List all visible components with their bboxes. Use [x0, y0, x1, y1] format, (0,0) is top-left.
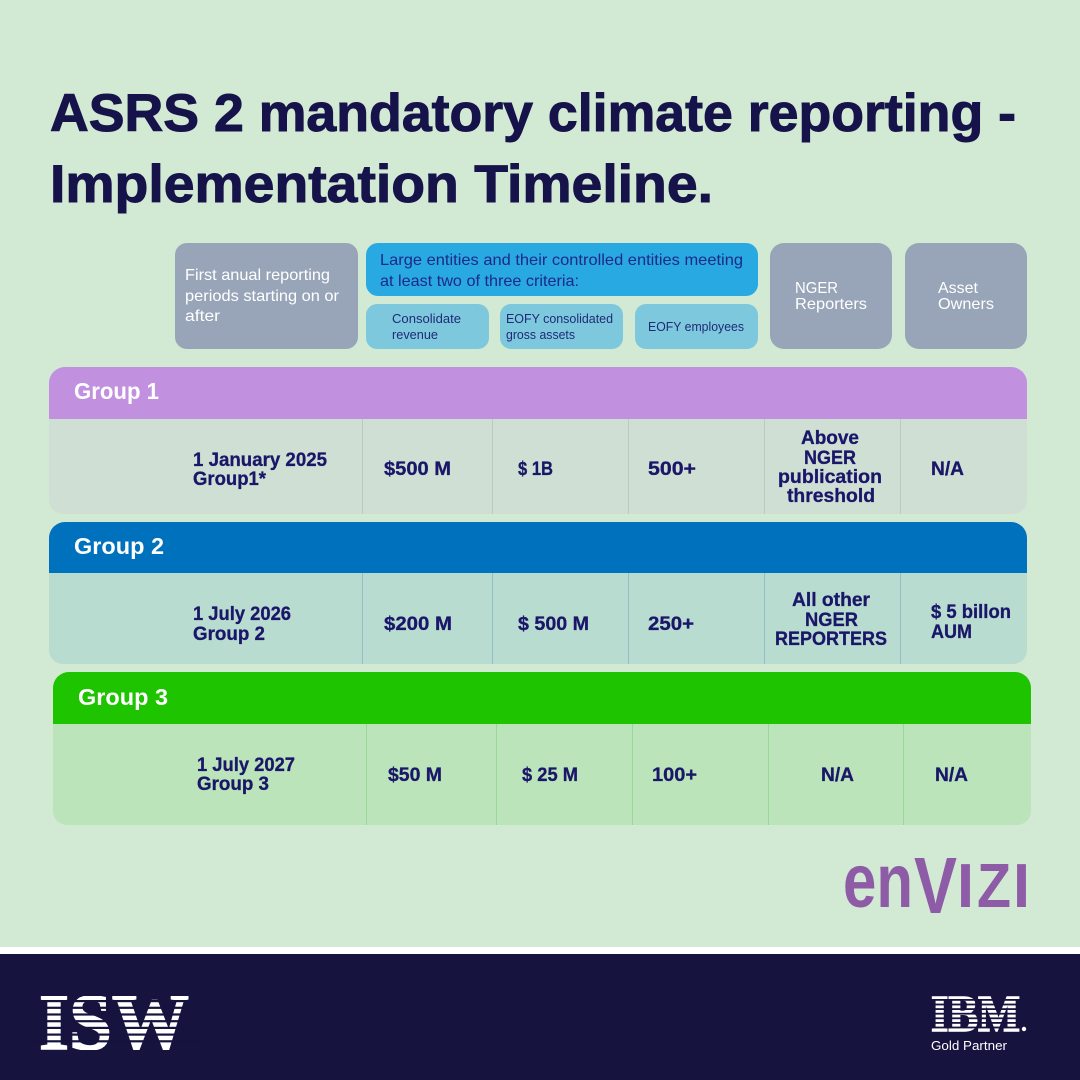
title: Implementation Timeline. [50, 155, 713, 214]
group 1 employees: 500+ [648, 459, 696, 480]
group 1 date: 1 January 2025 [193, 450, 327, 471]
header: NGER reporters: Reporters [795, 296, 867, 313]
group 1 heading: Group 1 [74, 378, 159, 404]
group 1 asset owners: N/A [931, 459, 964, 480]
group 1 NGER: Above [801, 428, 859, 449]
group 3 date: Group 3 [197, 774, 269, 795]
group 2 date: 1 July 2026 [193, 604, 291, 625]
header: NGER reporters [770, 243, 892, 349]
header: large entities criteria: at least two of three criteria: [380, 273, 579, 290]
title [50, 84, 1016, 214]
title: ASRS 2 mandatory climate reporting - [50, 84, 1016, 143]
group 2 heading: Group 2 [74, 533, 164, 559]
group 2 date [193, 604, 291, 645]
header: large entities criteria [366, 243, 758, 296]
header: asset owners: Asset [938, 280, 979, 297]
panel: group 3 [53, 672, 1031, 825]
group 2 assets: $ 500 M [518, 614, 589, 635]
group 3 date [197, 755, 295, 795]
header: first annual reporting periods: after [185, 308, 221, 325]
group 2 asset owners: AUM [931, 622, 972, 643]
header: NGER reporters: NGER [795, 280, 838, 297]
header: asset owners: Owners [938, 296, 994, 313]
panel: group 1 [49, 367, 1027, 514]
group 1 NGER: threshold [787, 486, 875, 507]
group 3 NGER: N/A [821, 765, 854, 786]
IBM Gold Partner logo: IBM [931, 986, 1020, 1043]
group 1 revenue: $500 M [384, 459, 451, 480]
group 3 employees: 100+ [652, 765, 697, 786]
header: large entities criteria: Large entities and their controlled entities meeting [380, 252, 743, 269]
group 3 date: 1 July 2027 [197, 755, 295, 776]
group 2 NGER: NGER [805, 610, 858, 631]
sub-header: gross assets [500, 304, 623, 349]
sub-header: employees [635, 304, 758, 349]
gold partner label: Gold Partner [931, 1038, 1008, 1053]
group 3 heading: Group 3 [78, 684, 168, 710]
envizi logo: I [1013, 852, 1030, 921]
group 1 NGER: NGER [804, 448, 856, 469]
group 1 date: Group1* [193, 469, 267, 490]
group 2 asset owners: $ 5 billon [931, 602, 1011, 623]
group 2 date: Group 2 [193, 624, 265, 645]
panel: group 2 [49, 522, 1027, 664]
group 3 asset owners: N/A [935, 765, 968, 786]
ISW logo: ISW [39, 979, 189, 1067]
group 1 NGER [778, 428, 882, 507]
sub-header: gross assets: EOFY consolidated [506, 311, 613, 326]
sub-header: employees: EOFY employees [648, 319, 744, 334]
group 2 asset owners [931, 602, 1011, 643]
group 2 employees: 250+ [648, 614, 694, 635]
sub-header: consolidated revenue: Consolidate [392, 311, 461, 326]
envizi logo [843, 839, 1030, 930]
group 1 NGER: publication [778, 467, 882, 488]
header: first annual reporting periods [175, 243, 358, 349]
group 3 revenue: $50 M [388, 765, 442, 786]
header: asset owners [905, 243, 1027, 349]
envizi logo: I [957, 852, 974, 921]
sub-header: consolidated revenue [366, 304, 489, 349]
header: first annual reporting periods: periods starting on or [185, 288, 340, 305]
group 1 assets: $ 1B [518, 459, 553, 480]
group 3 assets: $ 25 M [522, 765, 578, 786]
sub-header: gross assets: gross assets [506, 327, 575, 342]
envizi logo: en [843, 839, 913, 924]
header: first annual reporting periods: First anual reporting [185, 267, 330, 284]
footer band [0, 947, 1080, 1080]
group 2 NGER: All other [792, 590, 871, 611]
group 1 date [193, 450, 327, 490]
group 2 revenue: $200 M [384, 614, 452, 635]
group 2 NGER [775, 590, 887, 650]
table header row [175, 243, 1027, 349]
envizi logo: V [914, 841, 957, 930]
sub-header: consolidated revenue: revenue [392, 327, 438, 342]
group 2 NGER: REPORTERS [775, 629, 887, 650]
envizi logo: Z [977, 852, 1011, 921]
